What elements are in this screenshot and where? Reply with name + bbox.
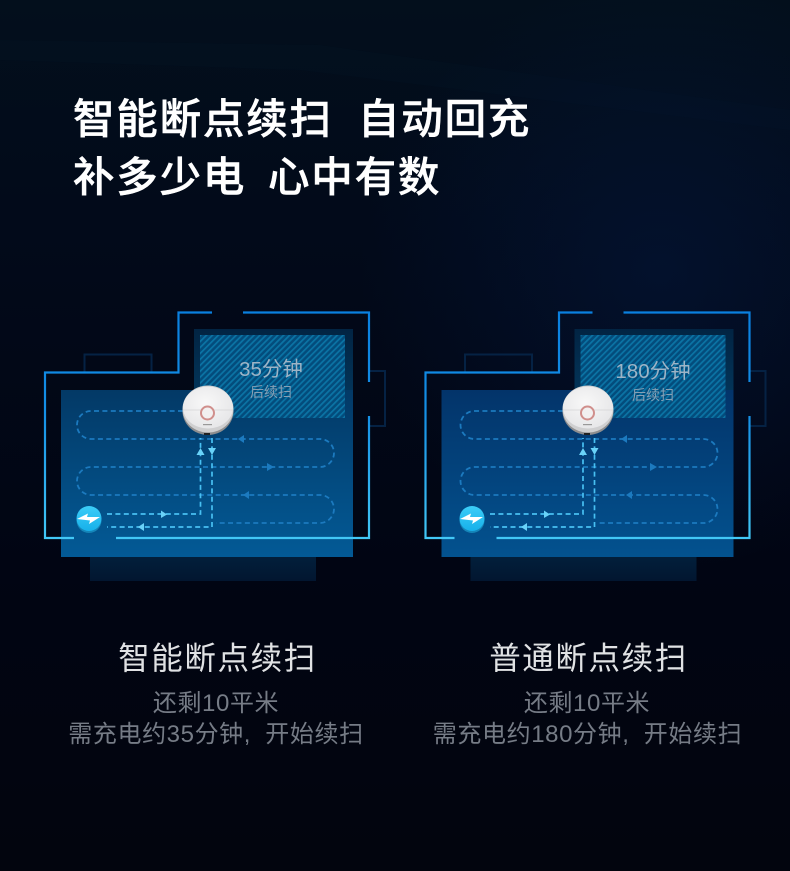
icon: charging dock [460,506,484,533]
caption: normal resume: 需充电约180分钟, 开始续扫 [433,721,742,748]
hatched unfinished area [580,335,726,418]
panel: normal resume map [426,312,766,581]
icon: robot vacuum [182,386,234,435]
label: 35 minutes: 35分钟 [239,358,303,381]
cleaning path [77,411,334,523]
return path [107,438,216,531]
upper room [194,329,353,391]
caption: smart resume [68,640,364,748]
title [73,96,531,200]
title: 智能断点续扫 [73,96,333,142]
hatched unfinished area [200,335,345,418]
caption: normal resume: 还剩10平米 [524,690,650,717]
caption: normal resume: 普通断点续扫 [489,640,688,676]
main floor [442,390,734,557]
label: 180 minutes: 180分钟 [615,360,691,383]
outline: small rooms [465,354,766,426]
caption: smart resume: 还剩10平米 [153,690,279,717]
upper room [574,329,734,391]
return path [490,438,598,531]
caption: smart resume: 智能断点续扫 [118,640,317,676]
panel: smart resume map [45,312,385,581]
title: 补多少电 [73,154,246,200]
title: 心中有数 [268,154,441,200]
walls [426,312,750,538]
main floor [61,390,353,557]
icon: charging dock [76,506,102,533]
icon: robot vacuum [562,386,614,435]
under-floor shadow block [90,557,316,581]
cleaning path [461,411,718,523]
label: resume: 后续扫 [250,384,292,400]
label: resume: 后续扫 [632,387,674,403]
title: 自动回充 [358,96,531,142]
caption: normal resume [433,640,742,748]
outline: small rooms [84,354,385,426]
caption: smart resume: 需充电约35分钟, 开始续扫 [68,721,364,748]
walls [45,312,369,538]
under-floor shadow block [470,557,696,581]
